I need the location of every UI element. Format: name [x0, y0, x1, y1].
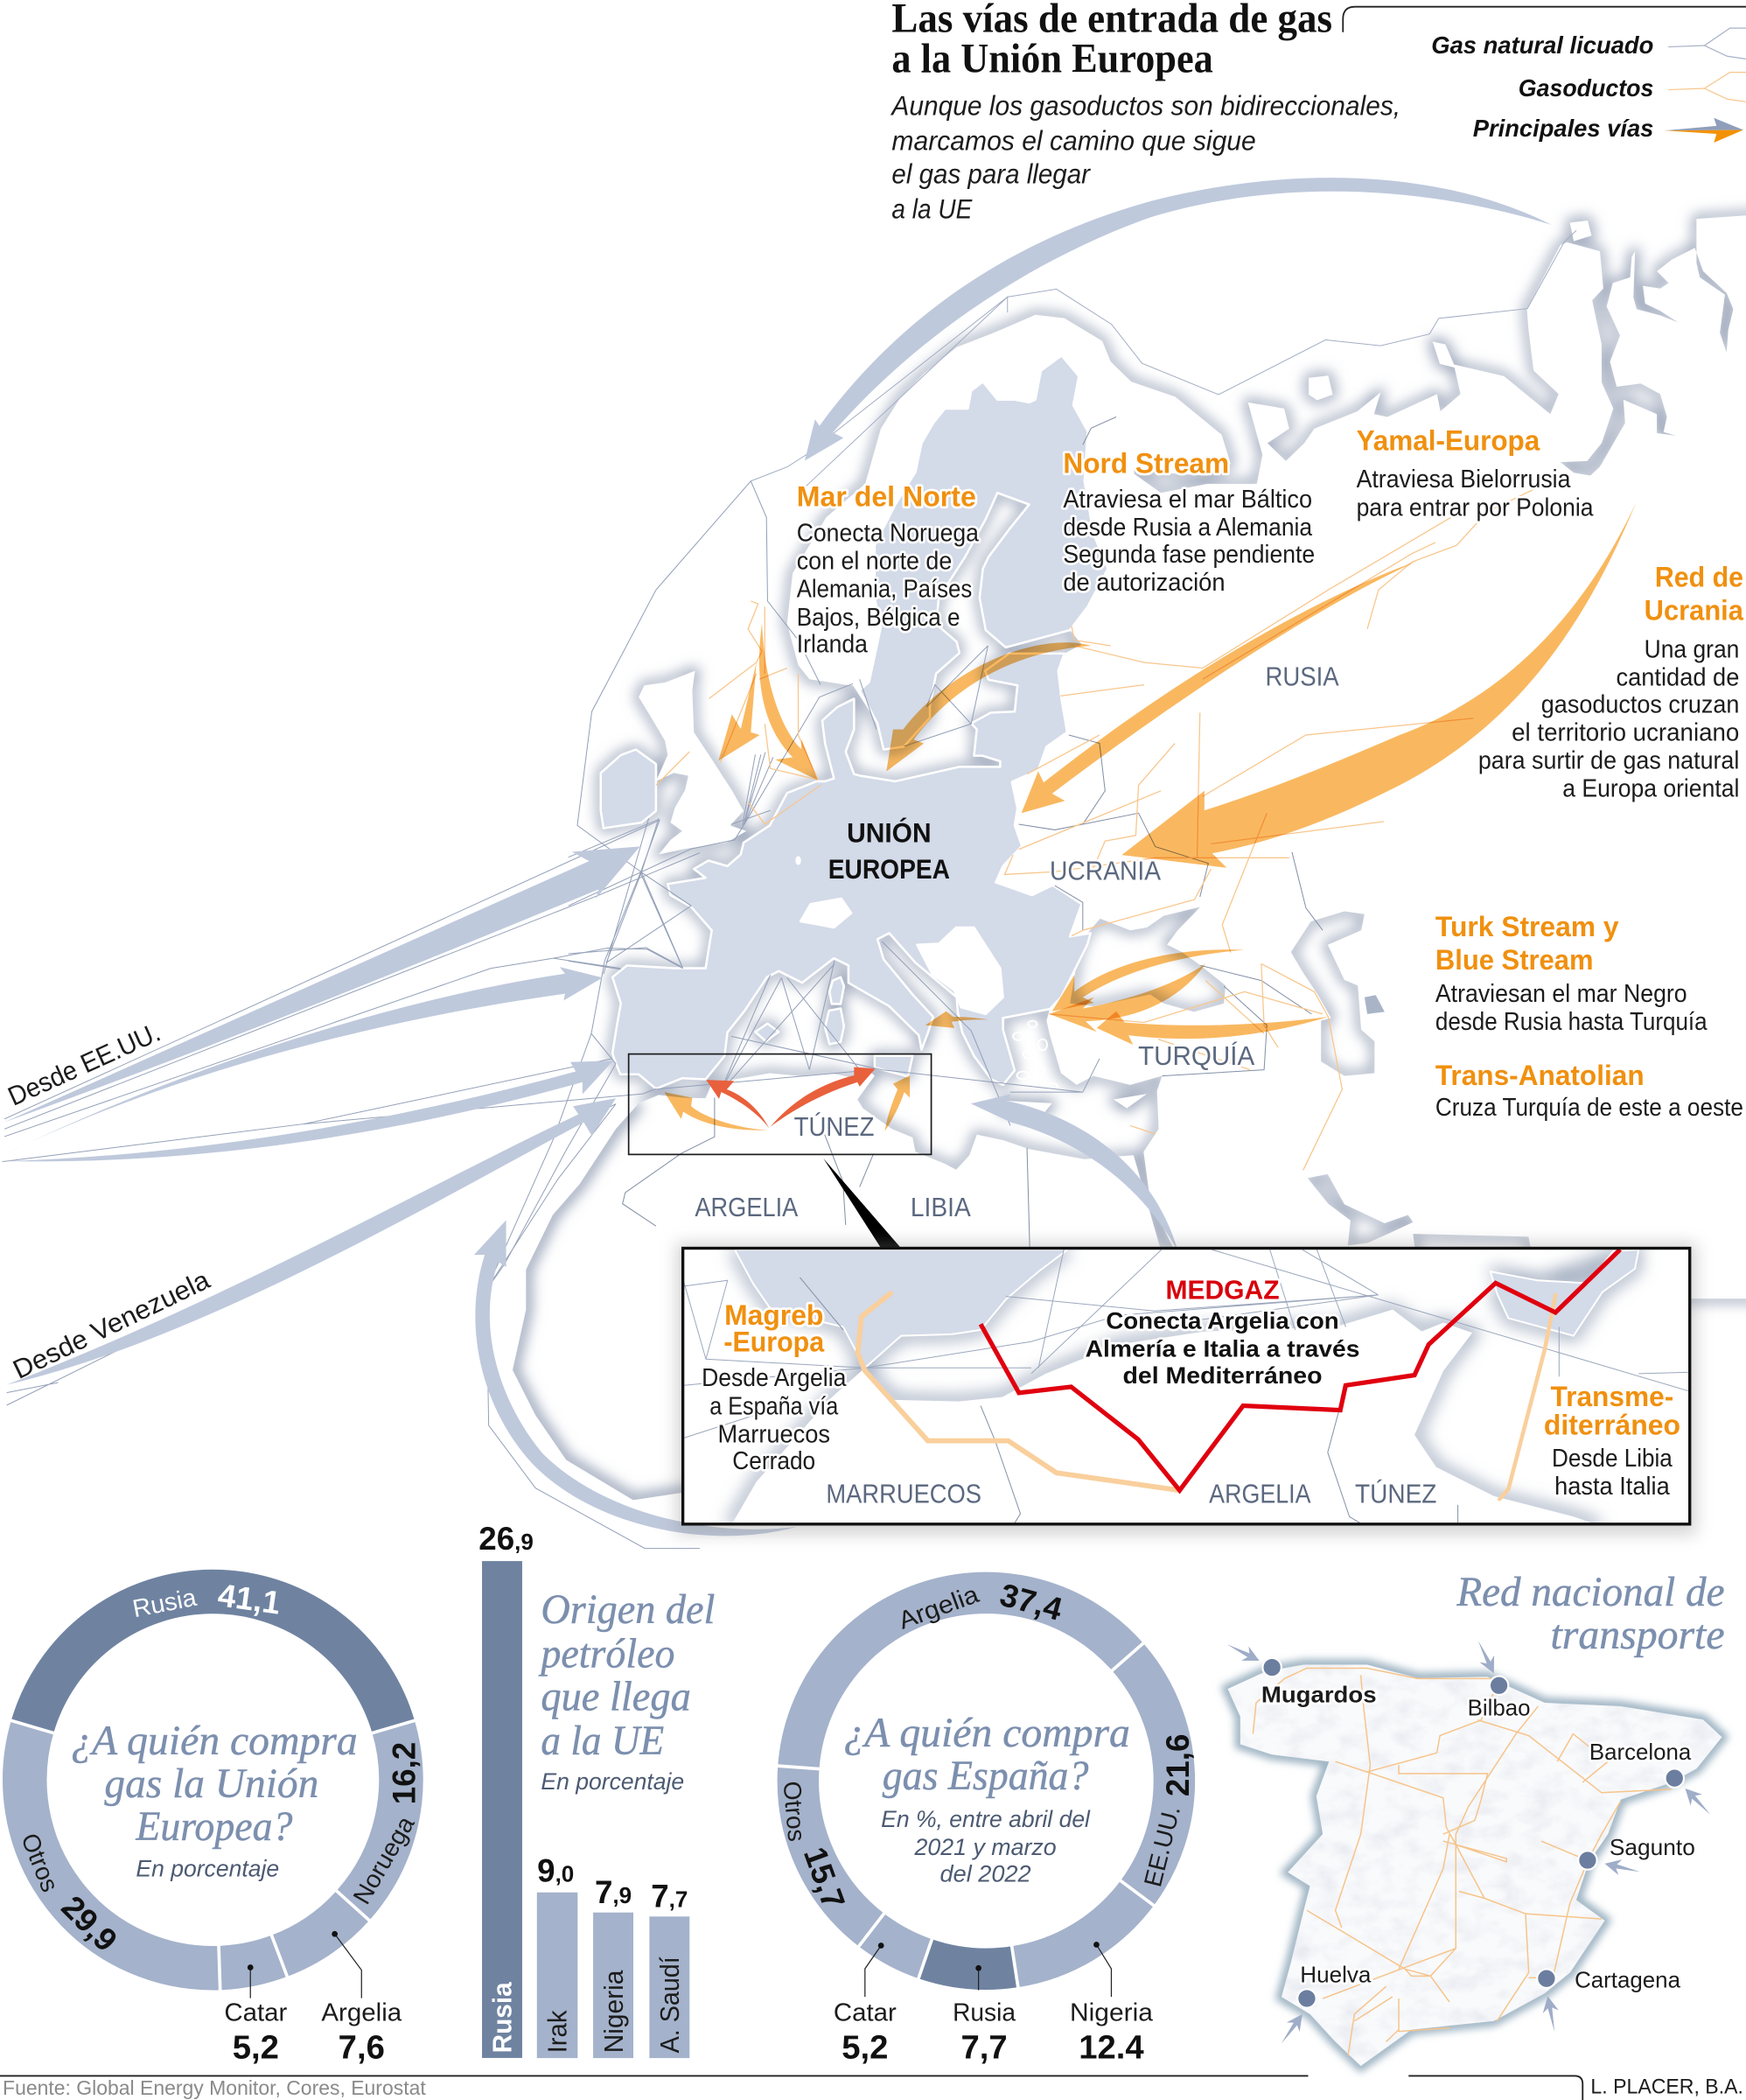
- inset: Transmediterraneo note: hasta Italia: [1554, 1472, 1670, 1500]
- callout: Nord Stream: de autorización: [1063, 568, 1226, 596]
- Medgaz route: [981, 1250, 1620, 1490]
- land: Eurasia and north Africa (white): [513, 214, 1746, 1500]
- inset: Magreb note: Magreb: [724, 1299, 823, 1331]
- oil heading: a la UE: [541, 1718, 664, 1764]
- oil heading: En porcentaje: [541, 1768, 684, 1795]
- donut centre heading: del 2022: [940, 1861, 1031, 1887]
- callout: Mar del Norte: con el norte de: [797, 547, 952, 575]
- Spain glow: [1227, 1665, 1722, 2066]
- Aegean islands: [1013, 1021, 1058, 1090]
- footer rule: [0, 2076, 1582, 2100]
- callout: Trans-Anatolian: Trans-Anatolian: [1435, 1060, 1645, 1091]
- arrow: Yamal-Europa: [1022, 561, 1417, 813]
- inset map: [684, 1250, 1689, 1525]
- legend labels: Gas natural licuado: [1431, 32, 1653, 59]
- legend labels: Principales vías: [1473, 115, 1653, 142]
- inset: Medgaz note: [1086, 1276, 1359, 1389]
- label: Unión Europea: [828, 817, 950, 885]
- terminal labels: Cartagena: [1575, 1966, 1681, 1992]
- oil heading: petróleo: [538, 1632, 674, 1677]
- inset country labels: TÚNEZ: [1355, 1478, 1436, 1508]
- bar labels: Nigeria: [599, 1970, 629, 2053]
- callouts: Catar and Argelia: [224, 1999, 402, 2067]
- oil heading: Origen del: [541, 1587, 715, 1633]
- donut labels: Argelia: [895, 1579, 982, 1634]
- label: Unión Europea: EUROPEA: [828, 854, 950, 885]
- arrow: from USA 1: [4, 846, 640, 1123]
- donut labels: Otros: [16, 1829, 65, 1895]
- arrow: from USA 3: [4, 1060, 613, 1161]
- leaders: [865, 1944, 1111, 1997]
- Magreb-Europa route: [858, 1293, 1180, 1490]
- bar labels: Rusia: [488, 1981, 518, 2053]
- legend labels: [1431, 32, 1653, 142]
- chart: who sells gas to Spain: [774, 1577, 1196, 2067]
- arrow: Medgaz to Italy: [771, 1067, 876, 1127]
- callout: Turk Stream y Blue Stream: desde Rusia hasta Turquía: [1435, 1007, 1708, 1035]
- callout: Yamal-Europa: Yamal-Europa: [1357, 424, 1540, 456]
- donut centre heading: ¿A quién compra: [843, 1711, 1130, 1756]
- callouts: Catar and Argelia: 5,2: [233, 2029, 279, 2067]
- subtitle: Aunque los gasoductos son bidireccionales,: [890, 91, 1400, 122]
- inset background: [683, 1249, 1690, 1524]
- bar values: 26,9: [478, 1521, 534, 1557]
- label: Desde EE.UU.: Desde EE.UU.: [3, 1018, 164, 1112]
- inset: Magreb note: Marruecos: [717, 1419, 830, 1447]
- heading: transporte: [1551, 1613, 1725, 1658]
- bar values: [478, 1521, 688, 1914]
- inset: Transmediterraneo note: diterráneo: [1544, 1409, 1680, 1440]
- callout: Nord Stream: [1063, 447, 1315, 596]
- callout: Red de Ucrania: gasoductos cruzan: [1541, 690, 1739, 718]
- callout: Yamal-Europa: para entrar por Polonia: [1357, 493, 1594, 521]
- inset: Medgaz note: Conecta Argelia con: [1106, 1307, 1339, 1334]
- arrow: from USA 2: [4, 967, 603, 1154]
- inset shadow: [676, 1242, 1696, 1535]
- terminal labels: Sagunto: [1610, 1834, 1695, 1860]
- donut labels: Noruega: [347, 1811, 420, 1908]
- arrow: Turk Stream: [1052, 949, 1245, 1012]
- subtitle: el gas para llegar: [891, 159, 1091, 190]
- donut centre heading: [843, 1711, 1130, 1887]
- chart: who sells gas to the EU: [9, 1577, 423, 2067]
- oil heading: [538, 1587, 715, 1795]
- label: Unión Europea: UNIÓN: [847, 817, 932, 849]
- callout: Red de Ucrania: Ucrania: [1645, 595, 1744, 626]
- donut labels: 21,6: [1160, 1734, 1196, 1796]
- callouts: Catar and Argelia: Argelia: [321, 1999, 402, 2027]
- inset country labels: [826, 1478, 1436, 1508]
- inset coast glow: [731, 1250, 1635, 1525]
- bar labels: A. Saudí: [655, 1956, 685, 2053]
- country labels: TURQUÍA: [1138, 1040, 1255, 1071]
- arrow: Blue Stream: [1050, 963, 1205, 1032]
- arrow: Mar del Norte east: [759, 623, 818, 780]
- arrow: through Suez: [971, 1095, 1178, 1252]
- donut labels: [16, 1577, 423, 1958]
- credit: L. PLACER, B.A.: [1590, 2076, 1743, 2098]
- Transmediterraneo route: [1499, 1295, 1555, 1499]
- donut labels: 29,9: [54, 1889, 124, 1958]
- bar: Nigeria: [593, 1913, 633, 2058]
- legend labels: Gasoductos: [1519, 74, 1653, 102]
- label: Desde Venezuela: Desde Venezuela: [9, 1264, 215, 1385]
- donut centre heading: [71, 1718, 358, 1881]
- inset: Magreb note: Desde Argelia: [702, 1363, 847, 1391]
- terminal labels: Bilbao: [1468, 1695, 1531, 1721]
- callout: Turk Stream y Blue Stream: [1435, 911, 1708, 1035]
- donut separators: [774, 1641, 1157, 1992]
- donut labels: 15,7: [797, 1843, 852, 1914]
- callout: Red de Ucrania: para surtir de gas natural: [1478, 746, 1739, 774]
- donut labels: [779, 1577, 1196, 1914]
- callouts: Catar, Rusia, Nigeria: 12.4: [1079, 2029, 1144, 2067]
- callout: Red de Ucrania: Red de: [1655, 561, 1743, 592]
- arrow: Red de Ucrania: [1121, 502, 1636, 868]
- callouts: Catar and Argelia: 7,6: [339, 2029, 385, 2067]
- callout: Nord Stream: Nord Stream: [1063, 447, 1229, 479]
- callouts: Catar, Rusia, Nigeria: 7,7: [960, 2029, 1008, 2067]
- heading: Red nacional de: [1456, 1570, 1725, 1615]
- inset country labels: MARRUECOS: [826, 1479, 981, 1508]
- bar values: 7,7: [651, 1879, 688, 1914]
- callout: Yamal-Europa: Atraviesa Bielorrusia: [1357, 465, 1571, 493]
- title: [891, 0, 1332, 82]
- arrow: from Venezuela: [7, 1098, 616, 1385]
- donut centre heading: ¿A quién compra: [71, 1718, 358, 1764]
- subtitle: marcamos el camino que sigue: [891, 125, 1256, 156]
- inset land: north Africa: [731, 1310, 1599, 1525]
- terminal labels: [1261, 1681, 1695, 1992]
- legend: pipeline lines: [1668, 73, 1746, 102]
- callout: Mar del Norte: Conecta Noruega: [797, 518, 979, 546]
- EU territory (blue): [601, 355, 1108, 1088]
- inset: Transmediterraneo note: [1544, 1381, 1680, 1500]
- inset: Magreb note: -Europa: [723, 1326, 825, 1357]
- callout: Red de Ucrania: a Europa oriental: [1562, 774, 1739, 802]
- donut centre heading: gas España?: [883, 1754, 1089, 1799]
- locator wedge: [823, 1158, 901, 1249]
- inset: Transmediterraneo note: Desde Libia: [1552, 1444, 1673, 1472]
- callout: Red de Ucrania: [1478, 561, 1744, 802]
- callout: Red de Ucrania: Una gran: [1645, 635, 1739, 663]
- panel: main map: [3, 178, 1746, 1549]
- donut segments: [798, 1592, 1174, 1969]
- leader dots: [248, 1931, 338, 1970]
- donut segments: [24, 1592, 401, 1968]
- callout: Red de Ucrania: cantidad de: [1617, 663, 1739, 691]
- arrow: Nord Stream: [886, 642, 1091, 771]
- callouts: Catar, Rusia, Nigeria: [834, 1999, 1154, 2067]
- arrow: around Africa: [474, 1220, 797, 1536]
- callout: Mar del Norte: Alemania, Países: [797, 575, 972, 603]
- inset: Magreb note: a España vía: [709, 1391, 838, 1419]
- West Africa inner coast shade: [513, 1103, 696, 1500]
- donut centre heading: 2021 y marzo: [913, 1834, 1057, 1860]
- donut centre heading: En porcentaje: [136, 1855, 279, 1881]
- bar: Irak: [537, 1893, 577, 2058]
- country labels: UCRANIA: [1050, 857, 1162, 886]
- callouts: Catar, Rusia, Nigeria: Rusia: [953, 1999, 1016, 2027]
- blue thin LNG lines central: [569, 481, 1100, 1125]
- legend: arrow: [1665, 118, 1743, 143]
- terminal arrows: [1224, 1637, 1716, 2048]
- callouts: Catar, Rusia, Nigeria: 5,2: [842, 2029, 888, 2067]
- arrow: Mar del Norte west: [718, 662, 760, 760]
- coast glow: [601, 214, 1746, 1298]
- donut separators: [9, 1719, 417, 1992]
- Spain land: [1227, 1665, 1722, 2066]
- inset: Magreb note: [702, 1299, 847, 1474]
- callouts: Catar, Rusia, Nigeria: Catar: [834, 1999, 897, 2027]
- arrow: Medgaz to Spain: [706, 1080, 769, 1129]
- inset: Medgaz note: MEDGAZ: [1165, 1276, 1280, 1306]
- bar labels: Irak: [542, 2010, 572, 2053]
- panel: Spain national network: [1224, 1570, 1725, 2066]
- donut labels: Rusia: [130, 1583, 199, 1622]
- callout: Red de Ucrania: el territorio ucraniano: [1512, 718, 1739, 746]
- arrow: LNG from Arctic: [805, 178, 1552, 461]
- country labels: LIBIA: [911, 1193, 971, 1222]
- chart: oil origin bars: [478, 1521, 715, 2058]
- donut centre heading: gas la Unión: [104, 1761, 318, 1807]
- bar labels: [488, 1956, 685, 2053]
- inset: Medgaz note: del Mediterráneo: [1122, 1362, 1323, 1389]
- thin gas pipelines: [656, 473, 1567, 1170]
- donut centre heading: En %, entre abril del: [881, 1806, 1091, 1832]
- legend: LNG lines: [1668, 28, 1746, 59]
- inset: Medgaz note: Almería e Italia a través: [1086, 1336, 1359, 1362]
- panel: inset Medgaz: [676, 1242, 1696, 1535]
- heading: [1456, 1570, 1725, 1658]
- title: a la Unión Europea: [891, 37, 1213, 82]
- arrow: TAP Adriatic: [925, 1012, 988, 1028]
- donut labels: EE.UU.: [1138, 1802, 1185, 1889]
- country labels: RUSIA: [1265, 662, 1339, 692]
- callout: Mar del Norte: Mar del Norte: [797, 481, 976, 513]
- arrow: Trans-Anatolian: [1097, 1012, 1328, 1045]
- terminal labels: Huelva: [1300, 1961, 1372, 1987]
- callout: Mar del Norte: Bajos, Bélgica e: [797, 603, 960, 631]
- terminal labels: Barcelona: [1589, 1739, 1692, 1765]
- inset frame: [683, 1249, 1690, 1524]
- subtitle: a la UE: [891, 193, 973, 224]
- inset land: Spain: [735, 1250, 1067, 1368]
- callout: Turk Stream y Blue Stream: Blue Stream: [1435, 944, 1594, 976]
- blue thin LNG lines north: [751, 230, 1576, 493]
- main route arrows, blue: [4, 178, 1552, 1536]
- callout: Trans-Anatolian: [1435, 1060, 1743, 1121]
- inset thin lines: [684, 1250, 1689, 1438]
- callouts: Catar, Rusia, Nigeria: Nigeria: [1070, 1999, 1154, 2027]
- country labels: ARGELIA: [695, 1193, 799, 1222]
- arrow: Transmediterraneo: [884, 1075, 910, 1131]
- callouts: Catar and Argelia: Catar: [224, 1999, 288, 2027]
- Spain pipelines: [1253, 1668, 1672, 2055]
- legend: [1343, 7, 1746, 143]
- leaders: [250, 1934, 361, 1998]
- bar values: 7,9: [595, 1874, 632, 1910]
- Aral sea: [1365, 995, 1385, 1014]
- donut centre heading: Europea?: [135, 1804, 293, 1850]
- inset: Magreb note: Cerrado: [732, 1446, 815, 1474]
- locator box: [629, 1054, 932, 1154]
- subtitle: [890, 91, 1400, 224]
- callout: Nord Stream: Segunda fase pendiente: [1063, 540, 1315, 568]
- country labels: [695, 662, 1339, 1222]
- map base: coasts and land: [513, 214, 1746, 1500]
- arrow: Magreb-Europa: [664, 1092, 767, 1130]
- donut labels: 41,1: [216, 1577, 283, 1621]
- main route arrows, orange: [664, 502, 1636, 1131]
- donut labels: 37,4: [996, 1577, 1066, 1628]
- inset land: Sicily: [1491, 1250, 1638, 1336]
- leader dots: [878, 1942, 1100, 1971]
- donut labels: Otros: [779, 1780, 811, 1843]
- callout: Mar del Norte: Irlanda: [797, 629, 868, 657]
- bar: Arabia Saudi: [649, 1916, 689, 2058]
- country borders: [623, 416, 1323, 1249]
- terminal labels: Mugardos: [1261, 1681, 1377, 1707]
- country labels: TÚNEZ: [794, 1111, 875, 1142]
- callout: Turk Stream y Blue Stream: Turk Stream y: [1435, 911, 1619, 942]
- inset: Transmediterraneo note: Transme-: [1551, 1381, 1673, 1412]
- blue thin LNG lines: [3, 820, 700, 1549]
- callout: Nord Stream: Atraviesa el mar Báltico: [1063, 485, 1312, 513]
- oil heading: que llega: [541, 1675, 691, 1720]
- inset country labels: ARGELIA: [1209, 1479, 1311, 1508]
- bar values: 9,0: [537, 1853, 574, 1889]
- source: Fuente: Global Energy Monitor, Cores, Eurostat: [3, 2076, 426, 2099]
- donut labels: 16,2: [387, 1742, 423, 1804]
- callout: Nord Stream: desde Rusia a Alemania: [1063, 513, 1312, 541]
- terminal dots: [1262, 1658, 1684, 2008]
- callout: Mar del Norte: [797, 481, 979, 657]
- bar: Rusia: [482, 1561, 522, 2058]
- callout: Yamal-Europa: [1357, 424, 1594, 521]
- callout: Turk Stream y Blue Stream: Atraviesan el mar Negro: [1435, 979, 1687, 1007]
